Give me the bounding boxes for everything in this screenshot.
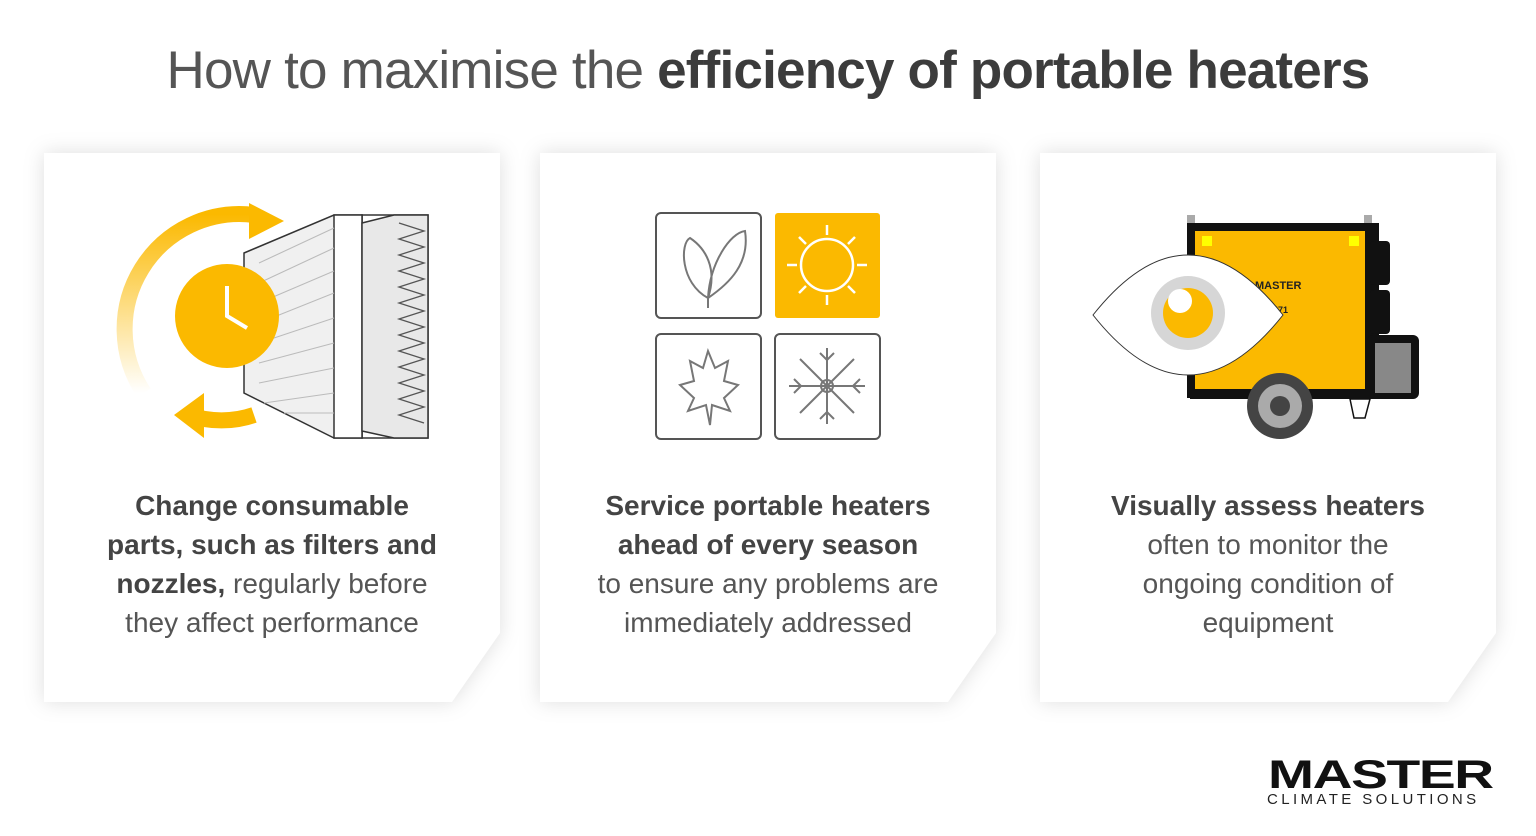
icon: eye over heater: MASTER [1255,280,1302,292]
text: visually assess: often to monitor the [1147,529,1389,560]
text: visually assess: ongoing condition of [1143,568,1393,599]
icon: clock with filters [116,203,429,439]
title: How to maximise the efficiency of portable heaters [167,41,1369,100]
panel: service ahead of season [534,146,1002,708]
icon: eye over heater: 471 [1273,305,1288,315]
panel: change consumable parts [38,146,506,708]
logo: master climate solutions: MASTER [1268,753,1493,797]
text: change consumable parts: parts, such as filters and [107,529,437,560]
text: visually assess: Visually assess heaters [1111,490,1425,521]
logo: master climate solutions: CLIMATE SOLUTIONS [1267,791,1480,808]
text: visually assess: equipment [1203,607,1333,638]
text: change consumable parts [108,495,436,638]
text: visually assess [1111,495,1424,638]
text: change consumable parts: nozzles, regularly before [116,568,428,599]
text: service heaters: Service portable heaters [605,490,931,521]
text: service heaters: ahead of every season [618,529,918,560]
text: service heaters [598,495,938,638]
panel: visually assess [1034,146,1502,708]
icon: eye over heater [1092,215,1419,439]
text: change consumable parts: Change consumable [135,490,409,521]
text: change consumable parts: they affect performance [125,607,419,638]
text: service heaters: immediately addressed [624,607,912,638]
icon: four seasons grid [655,212,881,440]
text: service heaters: to ensure any problems are [598,568,938,599]
